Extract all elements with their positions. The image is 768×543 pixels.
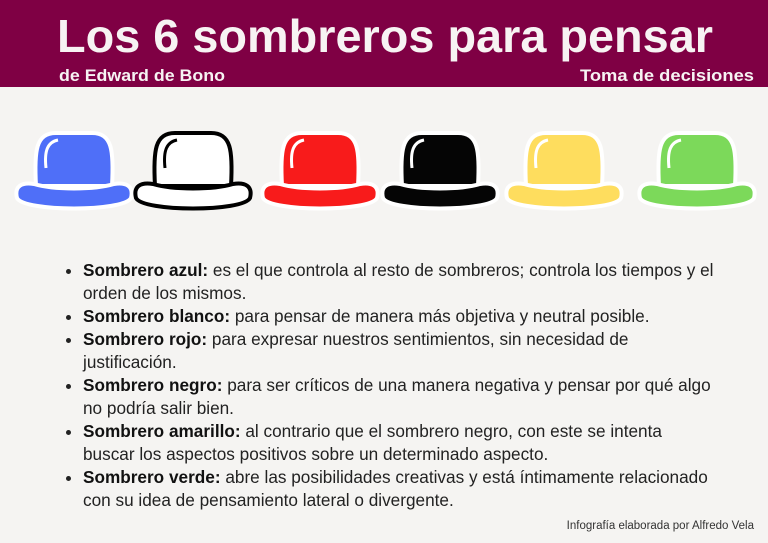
hat: white [135,133,251,208]
list of hats descriptions: Sombrero amarillo: al contrario que el sombrero negro, con este se intenta [83,421,662,441]
list of hats descriptions: buscar los aspectos positivos sobre un determinado aspecto. [83,444,548,464]
subtitle left: de Edward de Bono [59,66,225,85]
list of hats descriptions: Sombrero negro: para ser críticos de una manera negativa y pensar por qué algo [83,375,711,395]
hat: black [382,133,498,208]
subtitle right: Toma de decisiones [580,66,754,85]
list of hats descriptions: con su idea de pensamiento lateral o divergente. [83,490,454,510]
hats row [14,131,756,210]
list of hats descriptions: Sombrero azul: es el que controla al resto de sombreros; controla los tiempos y el [83,260,713,280]
list of hats descriptions: no podría salir bien. [83,398,234,418]
title: Los 6 sombreros para pensar [57,10,713,62]
list of hats descriptions [66,260,713,510]
hat: yellow [506,133,622,208]
list of hats descriptions: Sombrero blanco: para pensar de manera más objetiva y neutral posible. [83,306,650,326]
list of hats descriptions: orden de los mismos. [83,283,246,303]
list of hats descriptions: justificación. [83,352,177,372]
header banner [0,0,768,87]
footer credit: Infografía elaborada por Alfredo Vela [567,520,754,532]
list of hats descriptions: Sombrero verde: abre las posibilidades creativas y está íntimamente relacionado [83,467,708,487]
hat: red [262,133,378,208]
list of hats descriptions: Sombrero rojo: para expresar nuestros sentimientos, sin necesidad de [83,329,628,349]
hat: green [639,133,755,208]
hat: blue [16,133,132,208]
